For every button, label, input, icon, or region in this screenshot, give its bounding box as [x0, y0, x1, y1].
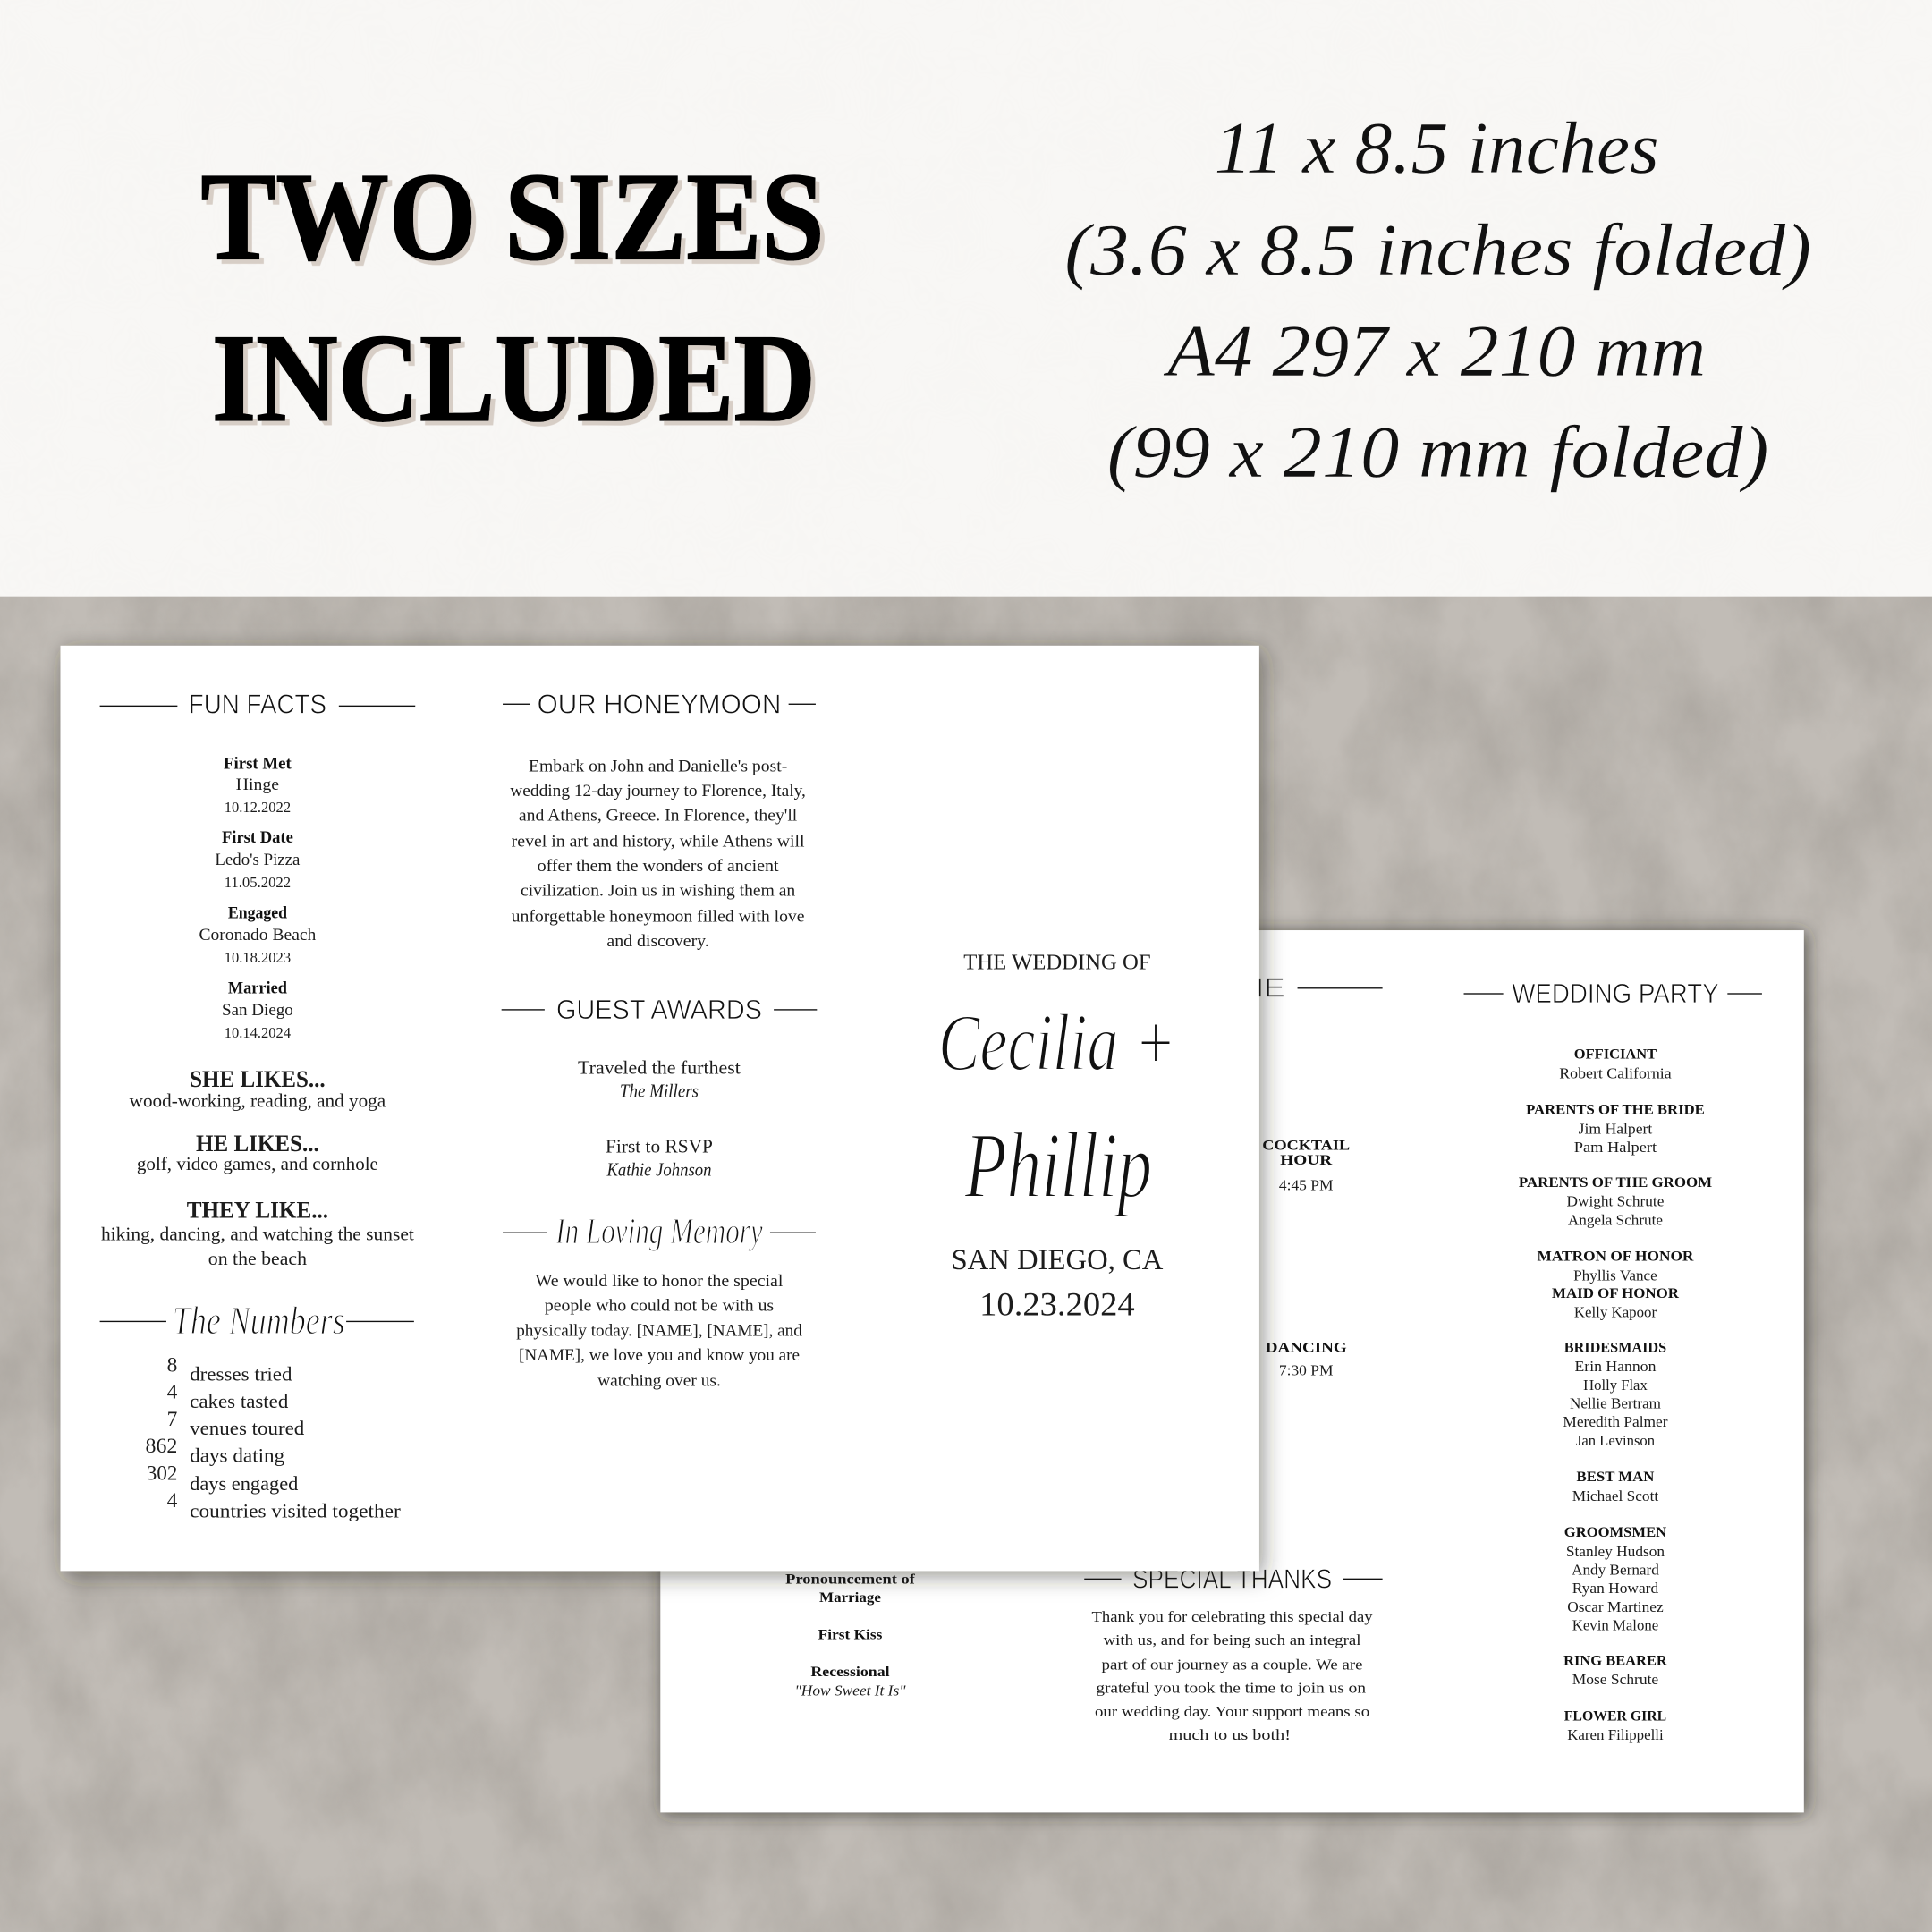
wedding party names: Michael Scott	[1572, 1487, 1658, 1504]
fun facts: milestones: Ledo's Pizza	[215, 851, 301, 869]
heading: fun facts: FUN FACTS	[189, 690, 326, 719]
ceremony order: First Kiss	[818, 1628, 882, 1643]
the numbers list: 8	[167, 1353, 177, 1377]
wedding party roles: MAID OF HONOR	[1552, 1286, 1679, 1301]
wedding party names: Oscar Martinez	[1567, 1598, 1664, 1615]
special thanks paragraph: Thank you for celebrating this special day	[1092, 1608, 1373, 1625]
heading: timeline: TIMELINE	[1137, 973, 1285, 1003]
fun facts: milestones: Hinge	[236, 775, 279, 794]
wedding party roles	[1519, 1047, 1712, 1724]
timeline: cocktail hour: 4:45 PM	[1279, 1177, 1334, 1194]
timeline: cocktail hour	[1262, 1139, 1350, 1194]
fun facts: milestones: First Date	[222, 828, 293, 847]
wedding party roles: BRIDESMAIDS	[1564, 1341, 1666, 1356]
wedding party names	[1559, 1064, 1672, 1743]
size details text block	[1064, 106, 1811, 493]
special thanks paragraph: part of our journey as a couple. We are	[1102, 1657, 1363, 1674]
size details text block: (99 x 210 mm folded)	[1107, 411, 1768, 493]
they like: on the beach	[208, 1250, 308, 1269]
wedding party names: Jan Levinson	[1576, 1432, 1655, 1449]
fun facts: milestones: 10.14.2024	[225, 1024, 291, 1041]
the numbers list: days dating	[190, 1444, 284, 1466]
wedding party names: Karen Filippelli	[1567, 1726, 1664, 1743]
heading: the numbers: The Numbers	[173, 1299, 345, 1343]
the numbers list: 4	[167, 1489, 178, 1513]
in loving memory paragraph: people who could not be with us	[545, 1297, 774, 1316]
concrete background	[0, 597, 1932, 1932]
guest awards list: First to RSVP	[606, 1138, 713, 1157]
honeymoon paragraph: and Athens, Greece. In Florence, they'll	[519, 806, 797, 825]
the numbers list: 7	[167, 1408, 178, 1431]
cover: couple title: Phillip	[964, 1114, 1152, 1217]
wedding party names: Nellie Bertram	[1570, 1395, 1662, 1412]
the numbers list: 4	[167, 1381, 178, 1404]
wedding party names: Dwight Schrute	[1567, 1193, 1664, 1210]
the numbers list: venues toured	[190, 1417, 304, 1439]
wedding party names: Robert California	[1559, 1064, 1672, 1081]
fun facts: milestones: Engaged	[228, 903, 288, 922]
in loving memory paragraph: [NAME], we love you and know you are	[519, 1346, 800, 1365]
top background	[0, 0, 1932, 597]
in loving memory paragraph	[516, 1272, 802, 1391]
he likes	[137, 1131, 378, 1174]
wedding party names: Holly Flax	[1583, 1377, 1648, 1394]
wedding party names: Stanley Hudson	[1566, 1543, 1665, 1560]
title: two sizes included: INCLUDED	[212, 309, 816, 448]
wedding party names: Mose Schrute	[1572, 1671, 1658, 1688]
she likes	[130, 1066, 386, 1112]
cover: couple title: 10.23.2024	[979, 1286, 1135, 1323]
size details text block: A4 297 x 210 mm	[1163, 309, 1706, 392]
in loving memory paragraph: watching over us.	[597, 1372, 721, 1391]
fun facts: milestones: Coronado Beach	[199, 926, 317, 945]
honeymoon paragraph: civilization. Join us in wishing them an	[521, 881, 796, 900]
heading: in loving memory: In Loving Memory	[555, 1210, 763, 1251]
in loving memory paragraph: We would like to honor the special	[536, 1272, 783, 1291]
wedding party roles: FLOWER GIRL	[1564, 1708, 1666, 1724]
panel: front of program	[61, 646, 1259, 1571]
wedding party roles: RING BEARER	[1563, 1653, 1667, 1668]
they like: THEY LIKE...	[187, 1197, 328, 1223]
special thanks paragraph: our wedding day. Your support means so	[1095, 1703, 1369, 1720]
the numbers list: cakes tasted	[190, 1390, 288, 1412]
honeymoon paragraph: offer them the wonders of ancient	[538, 857, 779, 876]
honeymoon paragraph: wedding 12-day journey to Florence, Italy,	[510, 782, 806, 801]
timeline: cocktail hour: COCKTAIL	[1262, 1139, 1350, 1154]
wedding party names: Kelly Kapoor	[1574, 1304, 1657, 1321]
special thanks paragraph: grateful you took the time to join us on	[1096, 1680, 1367, 1697]
wedding party names: Pam Halpert	[1574, 1139, 1657, 1156]
wedding party names: Meredith Palmer	[1563, 1413, 1668, 1430]
heading: wedding party: WEDDING PARTY	[1512, 979, 1719, 1009]
fun facts: milestones	[199, 755, 317, 1041]
guest awards list: Traveled the furthest	[578, 1058, 741, 1078]
the numbers list: countries visited together	[190, 1499, 401, 1521]
the numbers list: days engaged	[190, 1472, 298, 1495]
guest awards list: The Millers	[620, 1082, 699, 1102]
ceremony order: Marriage	[819, 1590, 881, 1606]
size details text block: (3.6 x 8.5 inches folded)	[1064, 208, 1811, 291]
wedding party names: Phyllis Vance	[1573, 1267, 1657, 1284]
wedding party names: Andy Bernard	[1572, 1562, 1659, 1579]
ceremony order: Recessional	[810, 1665, 890, 1680]
the numbers list: 302	[147, 1462, 177, 1486]
timeline: dancing: 7:30 PM	[1279, 1361, 1334, 1378]
size details text block: 11 x 8.5 inches	[1215, 106, 1659, 189]
special thanks paragraph: with us, and for being such an integral	[1104, 1631, 1361, 1648]
timeline: dancing	[1266, 1341, 1347, 1378]
guest awards list: Kathie Johnson	[606, 1161, 712, 1181]
fun facts: milestones: First Met	[224, 755, 292, 774]
timeline: dancing: DANCING	[1266, 1341, 1347, 1356]
guest awards list	[578, 1058, 741, 1181]
fun facts: milestones: 10.18.2023	[225, 949, 291, 966]
wedding party roles: PARENTS OF THE BRIDE	[1526, 1103, 1705, 1118]
the numbers list: 862	[146, 1435, 177, 1458]
title: two sizes included: TWO SIZES	[201, 148, 825, 286]
honeymoon paragraph: unforgettable honeymoon filled with love	[512, 907, 805, 926]
wedding party roles: MATRON OF HONOR	[1537, 1250, 1694, 1265]
wedding party names: Ryan Howard	[1572, 1580, 1659, 1597]
special thanks paragraph: much to us both!	[1169, 1726, 1291, 1743]
cover: couple title	[938, 950, 1176, 1323]
heading: guest awards: GUEST AWARDS	[556, 996, 762, 1025]
wedding party roles: GROOMSMEN	[1564, 1525, 1667, 1540]
fun facts: milestones: 10.12.2022	[225, 799, 291, 816]
honeymoon paragraph: Embark on John and Danielle's post-	[529, 757, 787, 775]
the numbers list	[146, 1353, 401, 1521]
they like	[101, 1197, 414, 1269]
she likes: wood-working, reading, and yoga	[130, 1092, 386, 1112]
honeymoon paragraph: and discovery.	[606, 932, 709, 951]
honeymoon paragraph	[510, 757, 806, 951]
he likes: golf, video games, and cornhole	[137, 1155, 378, 1174]
wedding party roles: PARENTS OF THE GROOM	[1519, 1175, 1712, 1191]
cover: couple title: THE WEDDING OF	[963, 950, 1151, 974]
cover: couple title: SAN DIEGO, CA	[951, 1244, 1164, 1276]
wedding party names: Jim Halpert	[1579, 1120, 1653, 1137]
panel: back of program	[660, 930, 1804, 1812]
ceremony order: Pronouncement of	[785, 1572, 916, 1588]
ceremony order	[785, 1572, 916, 1699]
honeymoon paragraph: revel in art and history, while Athens will	[512, 832, 805, 851]
she likes: SHE LIKES...	[190, 1066, 326, 1092]
fun facts: milestones: Married	[228, 979, 288, 997]
in loving memory paragraph: physically today. [NAME], [NAME], and	[516, 1321, 802, 1340]
wedding party roles: BEST MAN	[1577, 1470, 1655, 1485]
wedding party roles: OFFICIANT	[1574, 1047, 1657, 1063]
ceremony order: "How Sweet It Is"	[795, 1682, 906, 1699]
the numbers list: dresses tried	[190, 1362, 292, 1385]
heading: our honeymoon: OUR HONEYMOON	[538, 690, 781, 719]
special thanks paragraph	[1092, 1608, 1373, 1743]
title: two sizes included	[201, 148, 825, 448]
timeline: cocktail hour: HOUR	[1280, 1153, 1333, 1168]
wedding party names: Erin Hannon	[1575, 1358, 1657, 1375]
wedding party names: Kevin Malone	[1572, 1616, 1658, 1633]
fun facts: milestones: San Diego	[222, 1001, 293, 1020]
wedding party names: Angela Schrute	[1568, 1211, 1663, 1228]
cover: couple title: Cecilia +	[938, 997, 1176, 1088]
they like: hiking, dancing, and watching the sunset	[101, 1224, 414, 1244]
fun facts: milestones: 11.05.2022	[225, 874, 291, 891]
heading: special thanks: SPECIAL THANKS	[1132, 1565, 1332, 1595]
he likes: HE LIKES...	[196, 1131, 319, 1157]
